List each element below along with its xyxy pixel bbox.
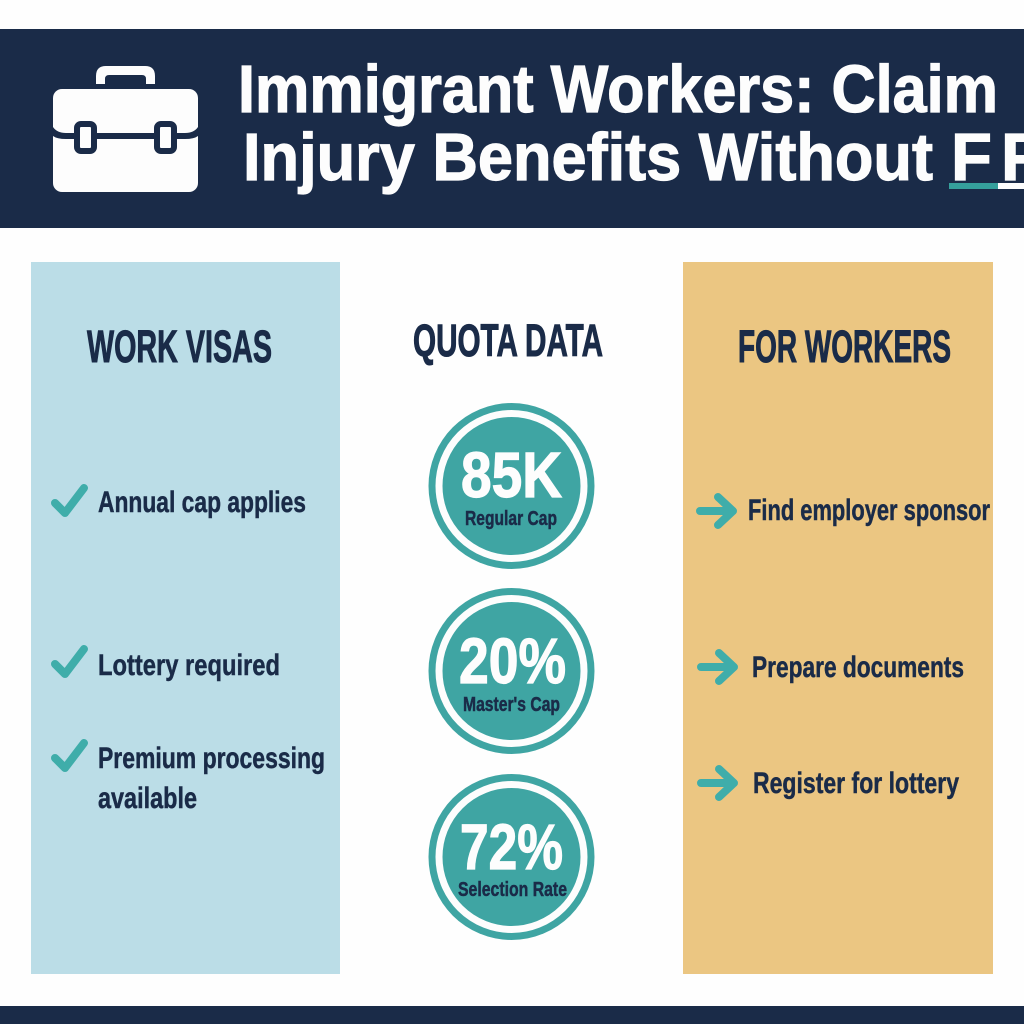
stat: 85K regular cap: 85K xyxy=(461,439,562,511)
item: annual cap applies xyxy=(55,486,306,519)
icon: briefcase xyxy=(53,66,198,192)
heading: work visas: WORK VISAS xyxy=(87,321,272,372)
footer band xyxy=(0,1006,1024,1024)
item: premium processing available xyxy=(55,742,325,815)
item: prepare documents: Prepare documents xyxy=(752,651,964,684)
stat: 20% master's cap: Master's Cap xyxy=(463,694,560,716)
stat: 72% selection rate: Selection Rate xyxy=(458,879,567,901)
stat: 20% master's cap: 20% xyxy=(459,625,566,697)
item: premium processing available: available xyxy=(98,782,197,815)
header banner xyxy=(0,29,1024,228)
panel: quota data xyxy=(413,315,603,940)
item: lottery required xyxy=(55,649,280,682)
item: register for lottery: Register for lottery xyxy=(753,767,959,800)
item: premium processing available: Premium processing xyxy=(98,742,325,775)
panel: work visas xyxy=(31,262,340,974)
heading: quota data: QUOTA DATA xyxy=(413,315,603,366)
panel: for workers xyxy=(683,262,993,974)
title: F xyxy=(951,120,992,195)
stat: 72% selection rate: 72% xyxy=(460,811,563,883)
stat: 85K regular cap: Regular Cap xyxy=(465,508,557,530)
item: lottery required: Lottery required xyxy=(98,649,280,682)
stat: 20% master's cap xyxy=(428,588,594,754)
item: annual cap applies: Annual cap applies xyxy=(98,486,306,519)
item: register for lottery xyxy=(701,767,959,800)
stat: 72% selection rate xyxy=(428,774,594,940)
item: prepare documents xyxy=(701,651,964,684)
stat: 85K regular cap xyxy=(428,403,594,569)
title xyxy=(238,52,1024,195)
title: Injury Benefits Without xyxy=(243,120,933,195)
title underline accent xyxy=(949,183,1024,189)
